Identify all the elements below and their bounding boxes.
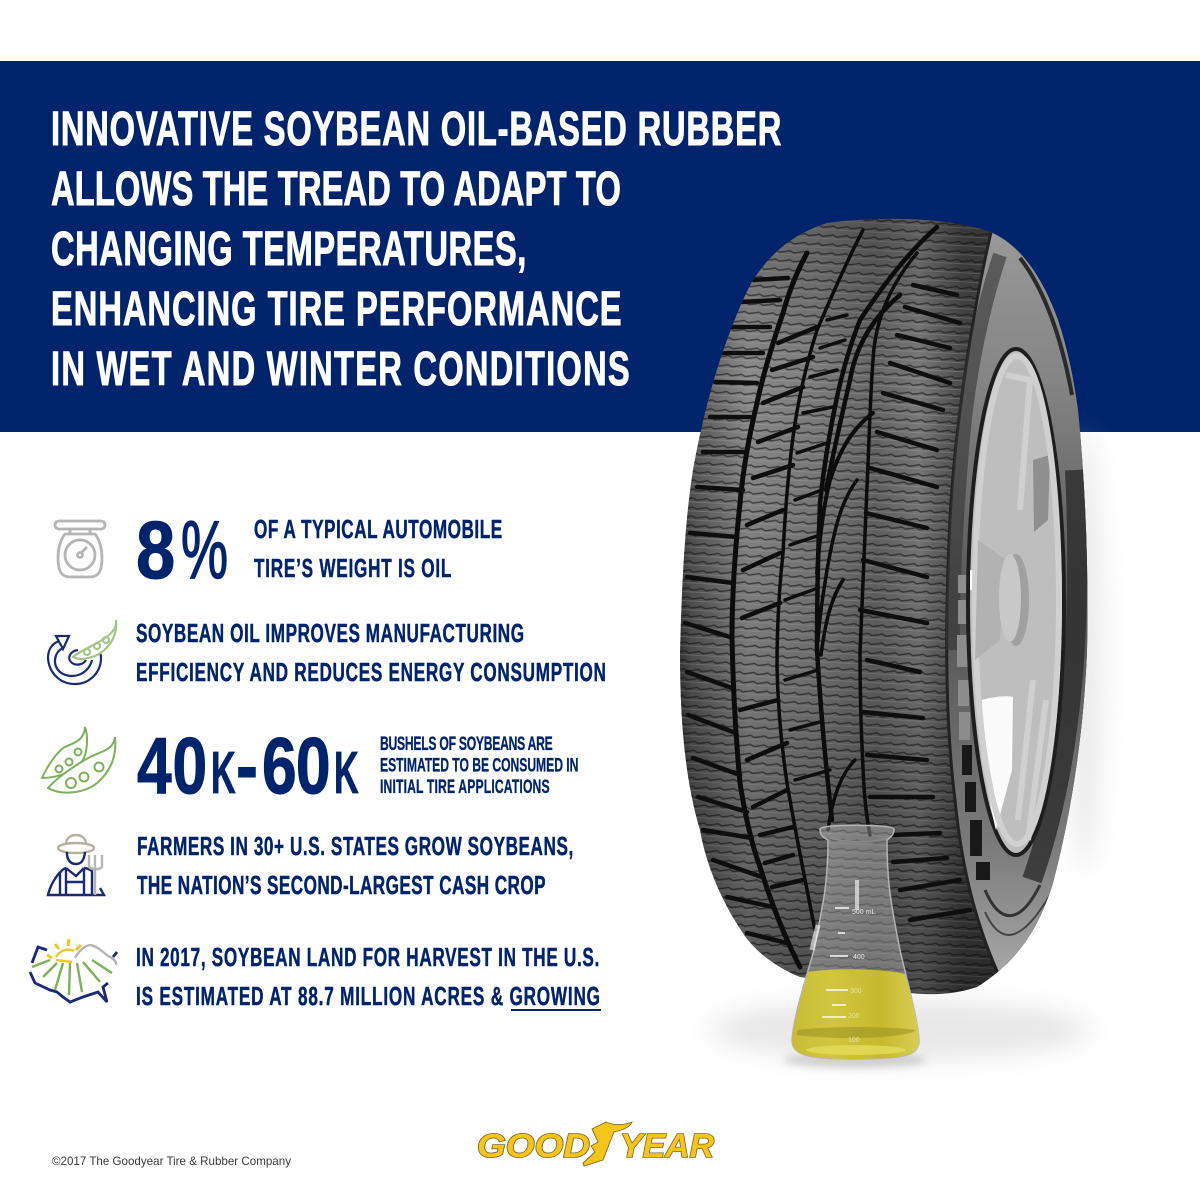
copyright: ©2017 The Goodyear Tire & Rubber Company (52, 1154, 291, 1168)
stat: bushels: K (211, 740, 236, 806)
stat: 8 percent: TIRE’S WEIGHT IS OIL (254, 553, 451, 583)
stat: 8 percent: % (181, 505, 228, 596)
oil flask (783, 825, 927, 1068)
oil flask: 100 (848, 1037, 860, 1044)
oil flask: 500 mL (852, 909, 875, 916)
stat: bushels: INITIAL TIRE APPLICATIONS (380, 778, 550, 798)
oil flask: 400 (853, 954, 865, 961)
headline (51, 102, 781, 396)
stat: bushels: ESTIMATED TO BE CONSUMED IN (380, 756, 578, 776)
stat: manufacturing efficiency: SOYBEAN OIL IMPROVES MANUFACTURING (136, 618, 524, 648)
tire with oil flask (670, 210, 1103, 1068)
stat: manufacturing efficiency (48, 618, 606, 687)
stat: farmers (48, 831, 573, 900)
icon: recycling arrow with soybean pod (48, 620, 116, 684)
oil flask: 300 (850, 988, 862, 995)
sidewall lettering blocks (957, 575, 970, 740)
headline: INNOVATIVE SOYBEAN OIL-BASED RUBBER (51, 102, 781, 156)
stat: bushels: 40 (137, 722, 207, 811)
stat: bushels (42, 721, 578, 811)
oil flask: 200 (848, 1013, 860, 1020)
stat: 8 percent: 8 (136, 505, 175, 596)
stat: bushels: K (334, 740, 359, 806)
headline: IN WET AND WINTER CONDITIONS (51, 342, 630, 396)
stat: 8 percent (55, 505, 502, 596)
wheel (968, 349, 1064, 855)
headline: ENHANCING TIRE PERFORMANCE (51, 282, 622, 336)
headline: CHANGING TEMPERATURES, (51, 222, 526, 276)
stat: bushels: BUSHELS OF SOYBEANS ARE (380, 735, 553, 755)
stat: farmers: FARMERS IN 30+ U.S. STATES GROW SOYBEANS, (137, 831, 573, 861)
icon: winged foot (583, 1122, 632, 1166)
tire sidewall (948, 232, 1088, 971)
headline: ALLOWS THE TREAD TO ADAPT TO (51, 162, 621, 216)
stat: bushels: 60 (262, 722, 331, 811)
icon: farmer with pitchfork (48, 835, 104, 895)
stat: bushels: - (236, 721, 258, 810)
icon: kitchen scale (55, 521, 105, 577)
stat: harvest land (30, 939, 601, 1011)
tire tread (670, 210, 1100, 1010)
stat: farmers: THE NATION’S SECOND-LARGEST CASH CROP (137, 870, 546, 900)
stat: manufacturing efficiency: EFFICIENCY AND REDUCES ENERGY CONSUMPTION (136, 657, 606, 687)
stat: harvest land: IN 2017, SOYBEAN LAND FOR HARVEST IN THE U.S. (136, 942, 599, 972)
Goodyear logo: GOOD (477, 1127, 590, 1164)
Goodyear logo (477, 1122, 714, 1166)
stat: harvest land: IS ESTIMATED AT 88.7 MILLION ACRES & GROWING (136, 981, 600, 1011)
stat: 8 percent: OF A TYPICAL AUTOMOBILE (254, 514, 502, 544)
icon: U.S. map with sunrise and fields (30, 939, 117, 1002)
icon: soybean pods (42, 727, 115, 793)
Goodyear logo: YEAR (620, 1127, 714, 1164)
header band (0, 61, 1200, 432)
